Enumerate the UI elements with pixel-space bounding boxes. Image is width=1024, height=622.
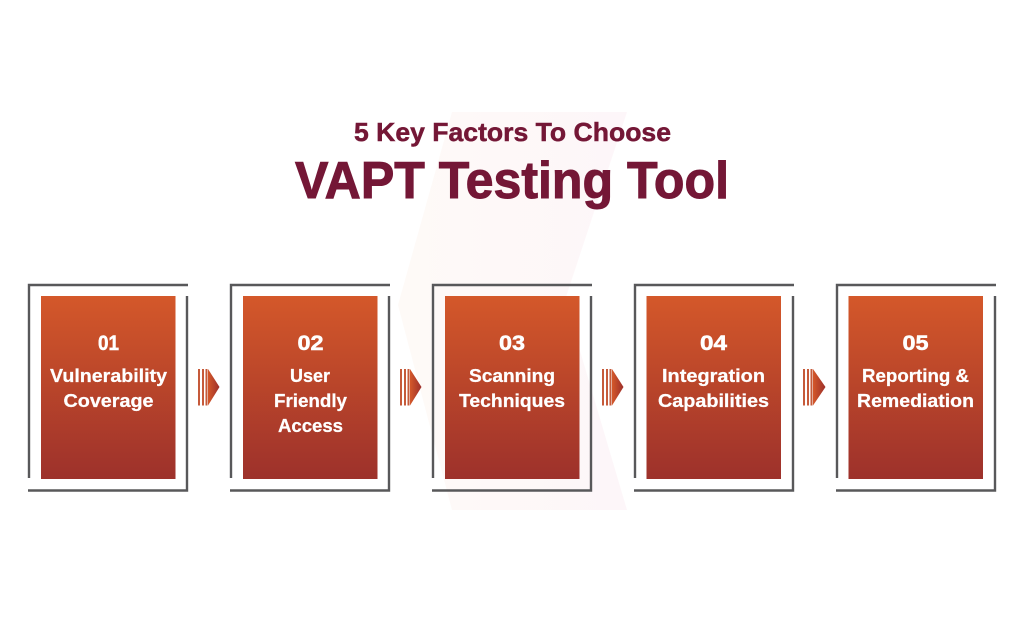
card 03: 03 [499, 332, 525, 355]
card 04: 04 [700, 332, 727, 355]
card 04: Capabilities [658, 391, 769, 411]
card 05 [836, 285, 996, 490]
subtitle: 5 Key Factors To Choose [354, 117, 671, 147]
arrow 3 [602, 369, 624, 406]
title: VAPT Testing Tool [295, 152, 729, 210]
card 01 [28, 285, 188, 490]
card 02: User [290, 366, 330, 386]
card 02: 02 [298, 332, 324, 355]
arrow 1 [198, 369, 220, 406]
card 04 [634, 285, 794, 490]
arrow 2 [400, 369, 422, 406]
card 02: Friendly [274, 391, 347, 411]
card 02 [230, 285, 390, 490]
card 03 [432, 285, 592, 490]
card 05: Reporting & [862, 366, 969, 386]
arrow 4 [803, 369, 826, 406]
card 05: Remediation [857, 391, 974, 411]
card 05: 05 [902, 332, 929, 355]
card 04: Integration [662, 366, 765, 386]
card 03: Techniques [459, 391, 565, 411]
background emblem [398, 112, 627, 510]
card 02: Access [278, 416, 343, 436]
card 01: Vulnerability [50, 366, 167, 386]
card 01: 01 [98, 332, 119, 355]
card 01: Coverage [64, 391, 154, 411]
card 03: Scanning [469, 366, 555, 386]
